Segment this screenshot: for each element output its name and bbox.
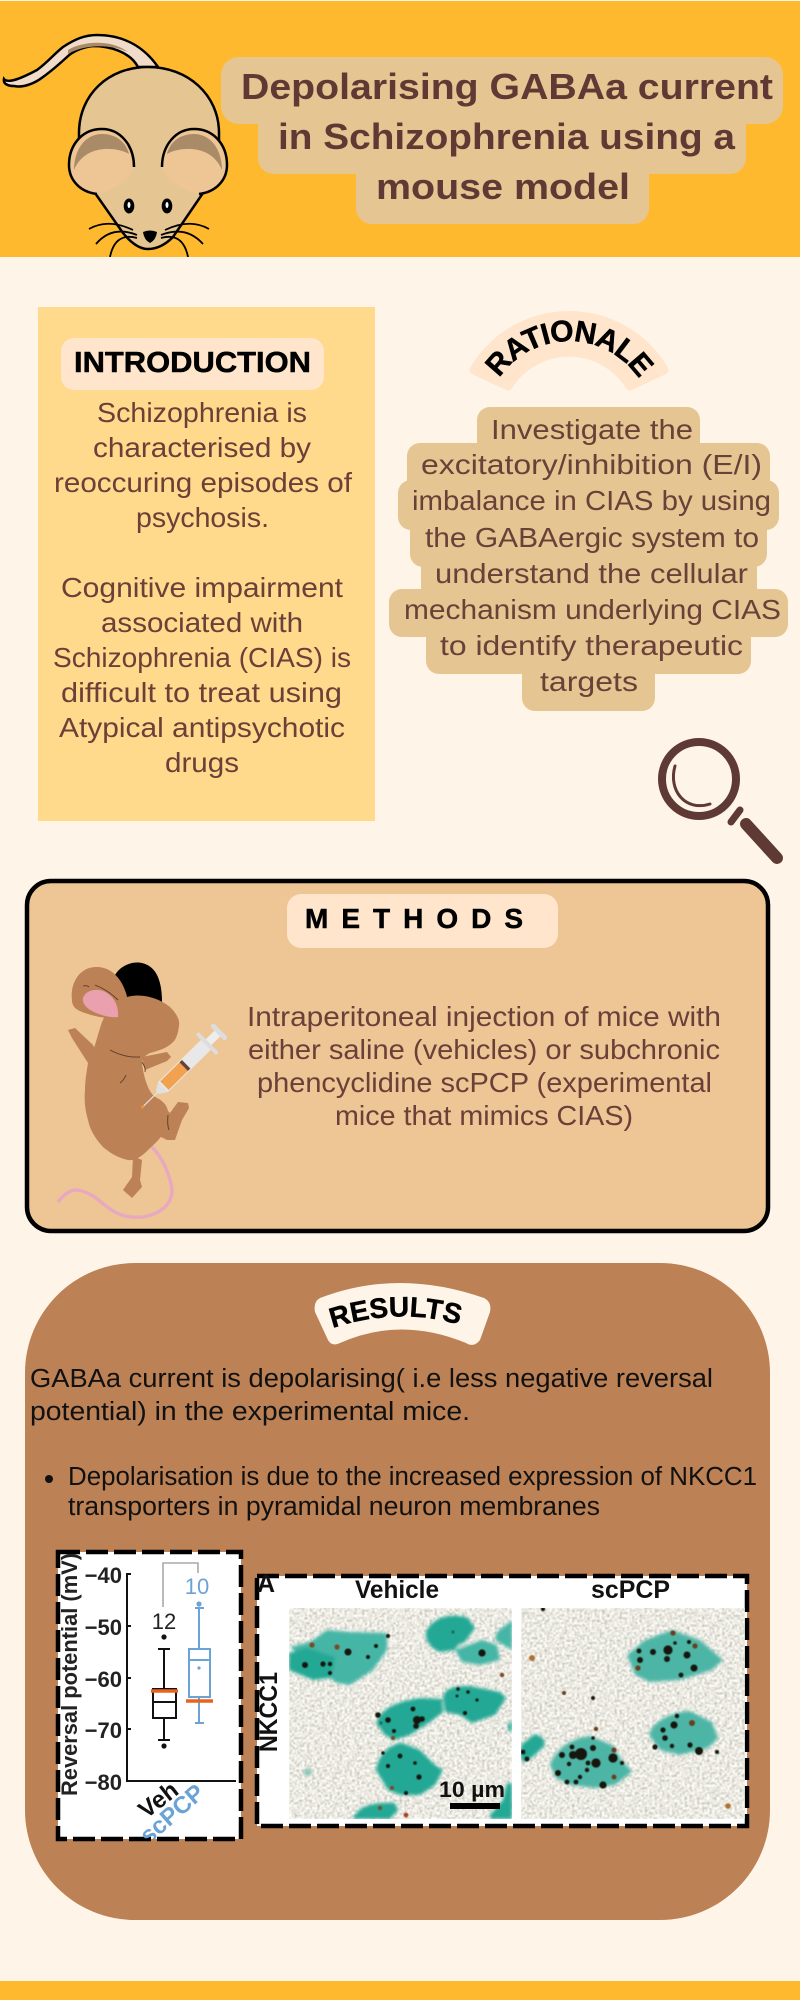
panel: results — [25, 1263, 770, 1920]
icon: cartoon mouse from above — [4, 35, 227, 257]
text block: introduction body: Atypical antipsychotic — [59, 712, 345, 743]
text block: rationale body: to identify therapeutic — [440, 630, 743, 661]
text block: introduction body: difficult to treat using — [61, 677, 342, 708]
scale bar — [450, 1803, 500, 1809]
text block: introduction body: characterised by — [93, 432, 311, 463]
micrograph: vehicle — [289, 1608, 512, 1819]
heading: methods — [287, 894, 558, 948]
title: mouse model — [376, 166, 630, 207]
chart: reversal potential box plot — [57, 1552, 241, 1849]
panel: rationale — [389, 311, 788, 864]
text block: methods body — [247, 1001, 721, 1131]
heading: introduction — [61, 338, 324, 390]
panel: introduction — [38, 307, 375, 821]
icon: syringe — [133, 1020, 231, 1117]
text block: rationale body: the GABAergic system to — [425, 522, 759, 553]
icon: magnifying glass — [662, 742, 777, 858]
title — [221, 57, 783, 224]
chart: reversal potential box plot: −40 — [85, 1563, 122, 1588]
text block: rationale body: understand the cellular — [435, 558, 748, 589]
heading: results badge: RESULTS — [328, 1296, 462, 1328]
text block: rationale body: mechanism underlying CIAS — [404, 594, 781, 625]
heading: results badge — [314, 1283, 490, 1345]
text block: methods body: Intraperitoneal injection of mice with — [247, 1001, 721, 1032]
text block: methods body: either saline (vehicles) or subchronic — [248, 1034, 720, 1065]
chart: reversal potential box plot: −70 — [85, 1718, 122, 1743]
axis title: Reversal potential (mV) — [57, 1553, 82, 1796]
chart: reversal potential box plot: 12 — [152, 1609, 176, 1634]
text block: introduction body — [53, 397, 352, 778]
chart: reversal potential box plot: scPCP — [135, 1779, 210, 1849]
figure: NKCC1 micrographs: NKCC1 — [255, 1672, 283, 1752]
heading: methods: METHODS — [305, 903, 523, 934]
figure: NKCC1 micrographs — [255, 1570, 747, 1826]
text block: results body: potential) in the experimental mice. — [30, 1398, 470, 1426]
chart: reversal potential box plot: 10 — [185, 1574, 209, 1599]
text block: rationale body: targets — [540, 666, 638, 697]
text block: introduction body: Cognitive impairment — [61, 572, 343, 603]
icon: mouse receiving injection — [58, 963, 231, 1217]
figure: NKCC1 micrographs: Vehicle — [355, 1576, 439, 1604]
chart: reversal potential box plot: −60 — [85, 1667, 122, 1692]
chart: reversal potential box plot: Veh — [133, 1776, 184, 1824]
text block: rationale body — [389, 407, 788, 711]
figure: NKCC1 micrographs: scPCP — [591, 1576, 670, 1604]
text block: introduction body: Schizophrenia (CIAS) is — [53, 642, 351, 673]
text block: methods body: mice that mimics CIAS) — [335, 1100, 633, 1131]
heading: introduction: INTRODUCTION — [74, 347, 311, 379]
text block: results body — [30, 1365, 757, 1521]
micrograph: scPCP — [521, 1607, 745, 1819]
micrograph: vehicle: 10 µm — [439, 1777, 505, 1802]
text block: rationale body: imbalance in CIAS by using — [412, 485, 771, 516]
chart: reversal potential box plot: −80 — [85, 1770, 122, 1795]
text block: introduction body: psychosis. — [136, 502, 269, 533]
text block: introduction body: drugs — [165, 747, 239, 778]
figure: NKCC1 micrographs: A — [257, 1570, 275, 1598]
text block: rationale body: excitatory/inhibition (E/I) — [421, 449, 762, 480]
text block: results body: Depolarisation is due to the increased expression of NKCC1 — [68, 1463, 757, 1491]
text block: results body: GABAa current is depolarising( i.e less negative reversal — [30, 1365, 713, 1393]
title: in Schizophrenia using a — [278, 116, 736, 157]
text block: rationale body: Investigate the — [491, 414, 693, 445]
chart: reversal potential box plot: −50 — [85, 1615, 122, 1640]
footer bar — [0, 1981, 800, 2000]
text block: introduction body: associated with — [101, 607, 303, 638]
text block: methods body: phencyclidine scPCP (experimental — [257, 1067, 712, 1098]
text block: results body: transporters in pyramidal neuron membranes — [68, 1493, 600, 1521]
heading: rationale arc: RATIONALE — [484, 320, 654, 378]
title: Depolarising GABAa current — [241, 66, 773, 107]
header banner — [0, 1, 800, 257]
text block: introduction body: Schizophrenia is — [97, 397, 307, 428]
panel: methods — [27, 881, 768, 1231]
text block: introduction body: reoccuring episodes of — [54, 467, 352, 498]
